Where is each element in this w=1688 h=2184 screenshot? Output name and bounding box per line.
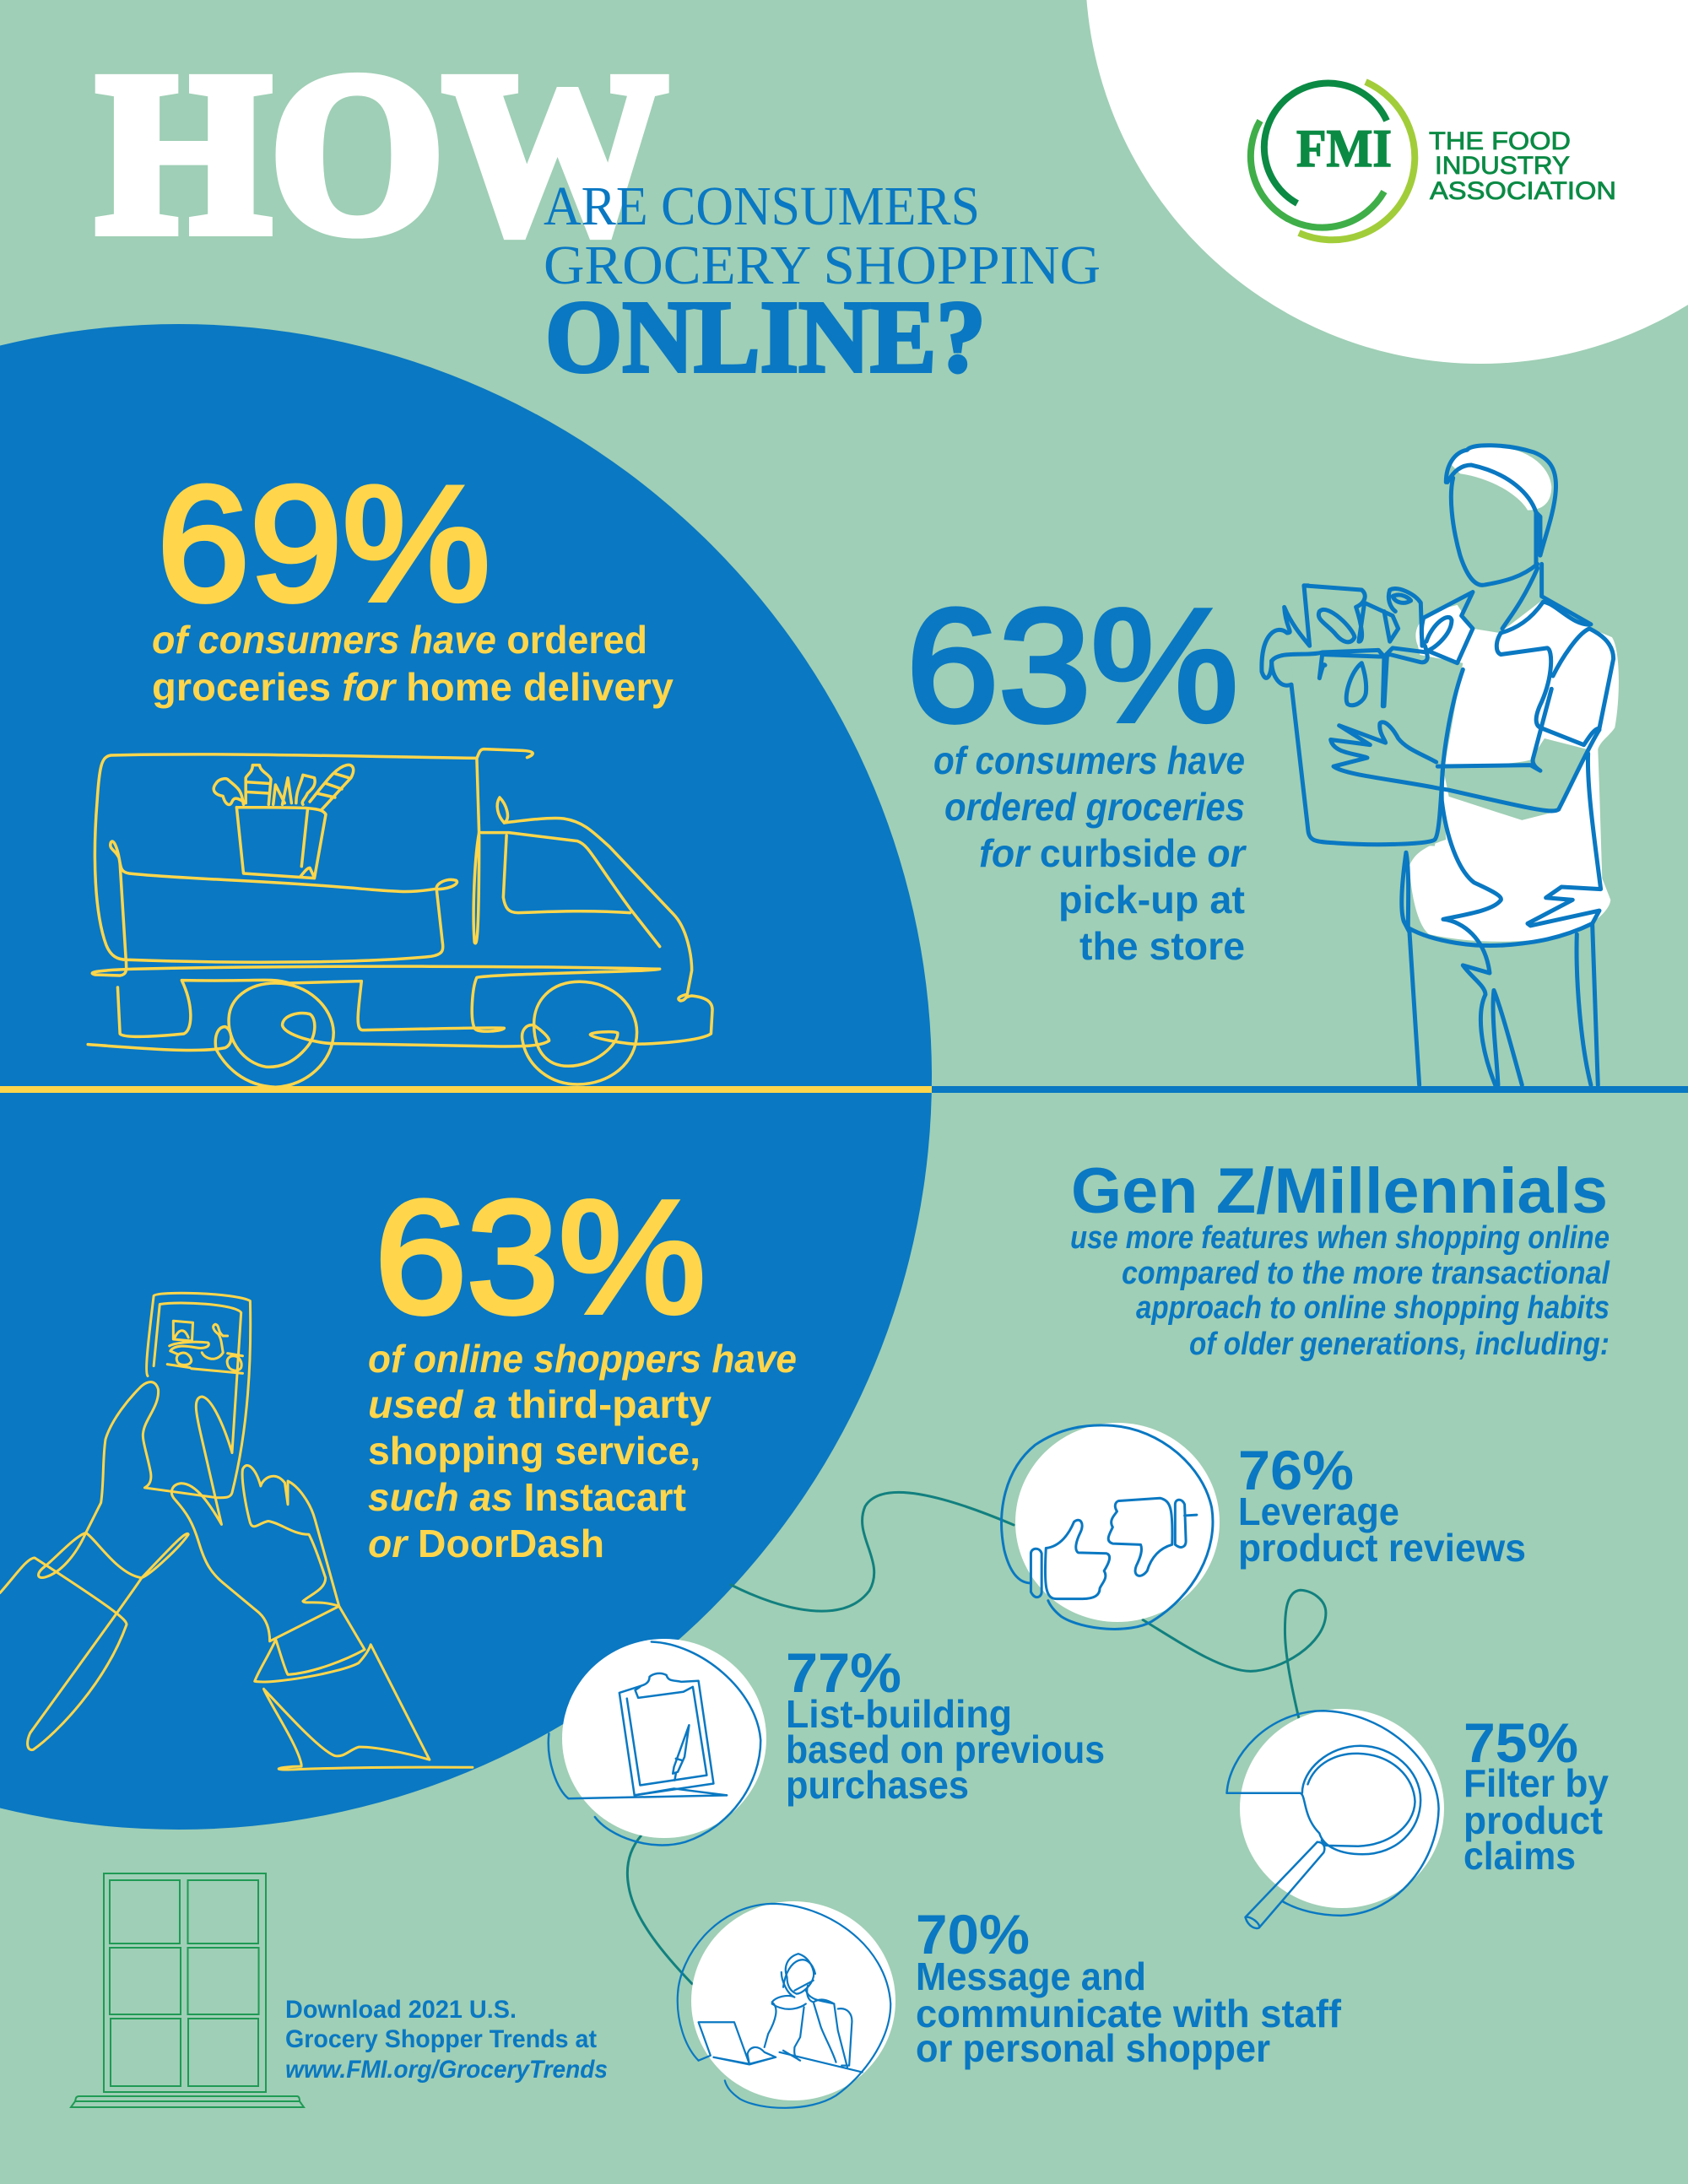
panel: product reviews [1002, 1423, 1526, 1629]
logo wordmark: ASSOCIATION [1430, 177, 1616, 205]
footer download text: Grocery Shopper Trends at [285, 2025, 597, 2053]
stat text: 70% [916, 1903, 1030, 1965]
panel: third-party shopping stat [368, 1168, 797, 1565]
curbside caption: of consumers have [933, 738, 1245, 782]
third-party caption: used a third-party [368, 1382, 711, 1426]
stat text: product [1463, 1798, 1603, 1842]
third-party caption: such as Instacart [368, 1475, 686, 1519]
logo monogram: FMI [1296, 118, 1392, 178]
intro text [1070, 1220, 1610, 1362]
stat text [1463, 1711, 1609, 1878]
stat text: product reviews [1238, 1526, 1526, 1570]
subtitle line one: ARE CONSUMERS [544, 176, 980, 237]
title word: HOW: HOW [97, 26, 667, 280]
circle badge [1015, 1423, 1220, 1622]
connector lines [627, 1492, 1326, 1984]
stat text: List-building [786, 1692, 1012, 1736]
intro text: approach to online shopping habits [1136, 1290, 1610, 1326]
stat text: 76% [1238, 1439, 1354, 1501]
panel: home delivery stat [152, 452, 674, 709]
stat text [916, 1903, 1342, 2070]
third-party caption: of online shoppers have [368, 1337, 797, 1381]
panel: Gen Z and Millennials intro [1070, 1155, 1610, 1362]
circle badge [562, 1639, 766, 1838]
home delivery caption: groceries for home delivery [152, 665, 674, 709]
third-party caption [368, 1337, 797, 1565]
icon: thumbs up and down [1002, 1425, 1213, 1629]
icon: person holding grocery bag [1262, 446, 1619, 1085]
stat text: 75% [1463, 1711, 1578, 1774]
intro text: compared to the more transactional [1122, 1256, 1610, 1291]
icon: window [71, 1873, 304, 2107]
stat text: claims [1463, 1834, 1576, 1878]
footer download text: www.FMI.org/GroceryTrends [285, 2056, 608, 2084]
panel: curbside pickup stat [906, 576, 1247, 968]
subtitle line two: GROCERY SHOPPING [544, 235, 1101, 296]
icon: person with headset at laptop [678, 1904, 890, 2108]
curbside caption [933, 738, 1247, 968]
FMI logo [1251, 82, 1616, 240]
intro text: of older generations, including: [1189, 1327, 1610, 1362]
panel: message staff [678, 1901, 1342, 2108]
panel: product claims filter [1227, 1709, 1609, 1928]
white corner circle [1085, 0, 1688, 364]
stat text: communicate with staff [916, 1992, 1342, 2035]
icon: magnifying glass [1227, 1711, 1439, 1928]
large blue circle [0, 324, 932, 1830]
curbside caption: pick-up at [1058, 878, 1245, 922]
heading: Gen Z/Millennials [1071, 1155, 1608, 1227]
title [97, 26, 1101, 394]
panel: list-building [549, 1639, 1105, 1845]
icon: delivery truck [88, 749, 712, 1087]
stat text: or personal shopper [916, 2026, 1270, 2070]
stat text [1238, 1439, 1526, 1570]
logo rings [1251, 82, 1415, 240]
subtitle line three: ONLINE? [545, 280, 986, 394]
stat text: 77% [786, 1641, 901, 1704]
logo wordmark [1429, 127, 1616, 205]
third-party caption: or DoorDash [368, 1522, 604, 1565]
ground line [0, 1086, 1688, 1093]
69 percent figure: 69% [157, 452, 490, 635]
stat text: purchases [786, 1763, 969, 1807]
63 percent curbside figure: 63% [906, 576, 1238, 755]
63 percent third-party figure: 63% [375, 1168, 706, 1347]
logo wordmark: INDUSTRY [1435, 152, 1570, 180]
stat text: Filter by [1463, 1761, 1609, 1805]
home delivery caption: of consumers have ordered [152, 618, 647, 662]
curbside caption: the store [1079, 924, 1245, 968]
intro text: use more features when shopping online [1070, 1220, 1610, 1256]
stat text: Message and [916, 1954, 1146, 1998]
circle badge [691, 1901, 895, 2100]
curbside caption: for curbside or [979, 831, 1247, 875]
footer download text: Download 2021 U.S. [285, 1996, 517, 2024]
home delivery caption [152, 618, 674, 709]
third-party caption: shopping service, [368, 1429, 701, 1473]
stat text: Leverage [1238, 1489, 1399, 1533]
stat text: based on previous [786, 1727, 1105, 1771]
footer download text [285, 1996, 608, 2084]
icon: hands holding phone [0, 1293, 473, 1770]
stat text [786, 1641, 1105, 1807]
curbside caption: ordered groceries [944, 785, 1245, 829]
icon: clipboard and pen [549, 1641, 760, 1845]
circle badge [1240, 1709, 1444, 1908]
logo wordmark: THE FOOD [1429, 127, 1571, 155]
